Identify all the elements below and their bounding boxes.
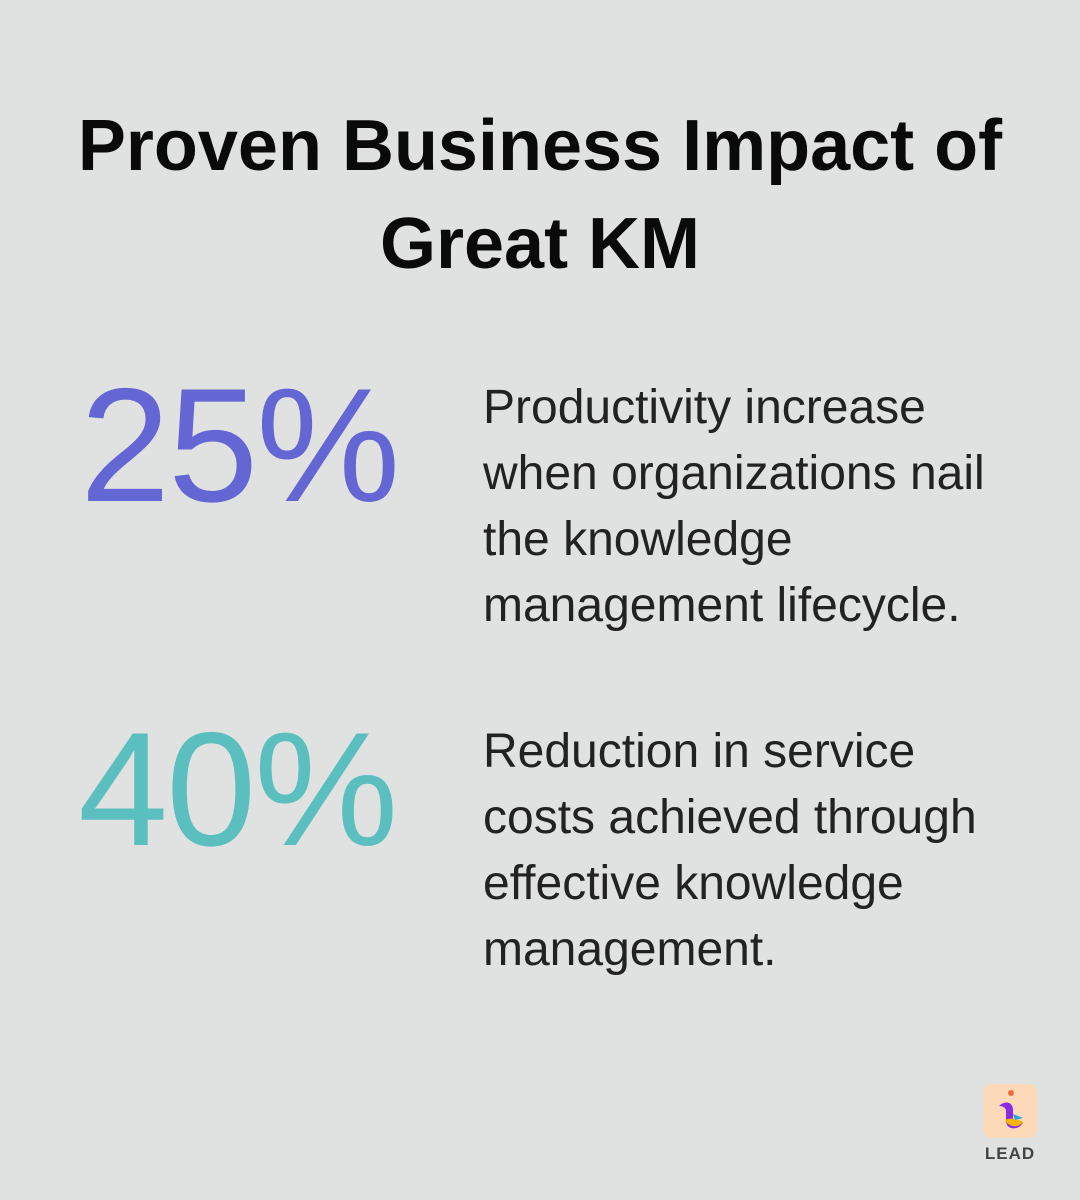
text: service costs: effective knowledge <box>483 857 904 910</box>
text: service costs: Reduction in service <box>483 725 915 778</box>
text: service costs: management. <box>483 923 777 976</box>
text: productivity: when organizations nail <box>483 447 985 500</box>
text: service costs: costs achieved through <box>483 791 977 844</box>
text: productivity: Productivity increase <box>483 381 926 434</box>
title: Great KM <box>380 204 700 284</box>
title <box>78 106 1002 284</box>
logo: LEAD <box>983 1084 1037 1163</box>
stat: 25%: 25% <box>80 355 398 536</box>
text: productivity: management lifecycle. <box>483 579 961 632</box>
stat: 40%: 40% <box>78 699 396 880</box>
text: productivity: the knowledge <box>483 513 793 566</box>
title: Proven Business Impact of <box>78 106 1002 186</box>
logo text: LEAD <box>985 1144 1035 1163</box>
text: service costs <box>483 725 977 976</box>
text: productivity <box>483 381 985 632</box>
icon: logo mark <box>983 1084 1037 1138</box>
